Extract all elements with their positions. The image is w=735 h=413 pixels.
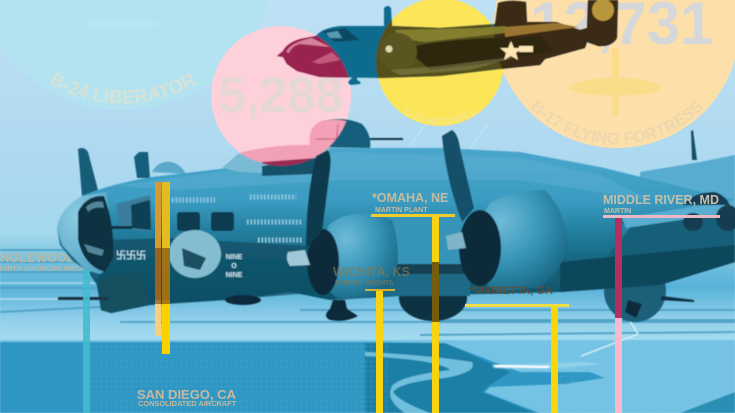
engine 2 spinner — [446, 232, 466, 250]
nose gun — [92, 226, 132, 229]
label: San Diego: CONSOLIDATED AIRCRAFT — [138, 399, 237, 408]
B-25 nose art — [312, 52, 340, 64]
nose art roundel — [169, 230, 221, 278]
aerial ground landscape — [0, 232, 735, 413]
near wing — [560, 200, 735, 292]
circle: B-17 Flying Fortress — [494, 0, 735, 148]
label: San Diego: SAN DIEGO, CA — [137, 387, 237, 402]
label: Inglewood: NORTH AMERICAN AIRCRAFT — [0, 266, 99, 273]
dorsal fin antenna — [691, 130, 697, 160]
propeller blade 1 — [306, 150, 331, 248]
label: Omaha: *OMAHA, NE — [372, 191, 448, 205]
nose art text: NINE — [226, 254, 243, 261]
cockpit pink canopy top — [238, 145, 336, 163]
side window bay — [116, 195, 152, 232]
B-25 rear fuselage sheen — [505, 23, 578, 37]
nose art text — [226, 254, 243, 279]
B-25 tail emblem — [592, 0, 614, 21]
chin gun — [58, 297, 108, 300]
number: 5,288: 5,288 — [218, 67, 343, 123]
bar: Wichita — [365, 289, 395, 413]
nose art text: O — [231, 263, 237, 270]
circle: 5,288 — [211, 26, 351, 166]
lower wing shadow — [560, 245, 735, 292]
B-25 insignia bar — [519, 46, 533, 52]
label: Middle River: MARTIN — [604, 208, 631, 215]
belly hatch — [225, 295, 261, 305]
engine 1 cowling — [318, 213, 398, 300]
far wing and tail — [640, 155, 735, 200]
bomber: B-17 Flying Fortress — [57, 119, 735, 322]
nose dark interior — [78, 196, 113, 272]
B-25 engine cowl — [379, 33, 417, 71]
top turret frames — [316, 124, 339, 140]
B-25 cockpit highlights — [326, 31, 342, 38]
mission marks: 卐卐卐 — [116, 250, 146, 262]
B-25 nose glazing — [286, 38, 330, 53]
B-25 dark engine underside — [405, 36, 552, 70]
wing engine pods — [683, 205, 735, 231]
label: B-25 Mitchell: B-25 MITCHELL — [404, 107, 476, 126]
engine 1 hub — [307, 229, 339, 295]
B-25 star insignia — [500, 41, 522, 60]
top turret — [311, 119, 403, 148]
label: Omaha — [372, 191, 448, 214]
B-25 lower sheen — [390, 56, 520, 75]
B-25 crimson nose — [276, 35, 350, 78]
antenna wires — [410, 124, 488, 148]
engine 2 hub — [459, 210, 501, 286]
exhaust pipe — [370, 264, 470, 274]
nacelle lower shadow — [372, 274, 470, 296]
chin turret — [98, 270, 150, 313]
label: Marietta: *MARIETTA, GA — [470, 285, 553, 297]
label: Inglewood: INGLEWOOD, CA — [0, 251, 100, 265]
propeller blade 2 — [442, 130, 474, 222]
cheek window — [131, 200, 151, 230]
label: Wichita: WICHITA, KS — [333, 265, 410, 279]
cockpit windshield — [222, 148, 330, 175]
ventral ball turret right — [604, 260, 694, 322]
cockpit crimson crew — [262, 158, 316, 168]
top turret pink glazing — [310, 120, 350, 148]
label: Omaha: MARTIN PLANT — [375, 207, 428, 214]
B-25 brown tail — [494, 0, 619, 70]
bars: San Diego pair — [155, 182, 170, 354]
label: Wichita: BOEING WICHITA — [335, 280, 394, 287]
nacelle between engines — [372, 213, 470, 293]
sky background — [0, 0, 735, 236]
label: Inglewood — [0, 251, 100, 273]
wing national marking — [683, 192, 730, 205]
belly ball turret — [399, 275, 467, 321]
B-25 propeller hub — [386, 46, 392, 52]
bomber: B-25 Mitchell in flight — [277, 0, 618, 85]
fuselage windows — [177, 212, 234, 231]
bar: Marietta — [465, 304, 569, 413]
circle: B-24 Liberator — [0, 0, 269, 104]
tail wheel strut — [326, 300, 358, 321]
B-25 olive mid section — [375, 20, 503, 79]
nose art text: NINE — [226, 272, 243, 279]
label: B-24 Liberator: B-24 LIBERATOR — [50, 72, 197, 104]
label: Middle River — [603, 193, 719, 215]
nose chrome highlights — [84, 202, 104, 256]
fuselage — [57, 148, 735, 313]
upper fuselage highlight — [115, 152, 650, 200]
B-25 cockpit window — [322, 28, 360, 42]
label: Wichita — [333, 265, 410, 287]
label: B-17 Flying Fortress: B-17 FLYING FORTRESS — [531, 100, 702, 144]
circle: B-25 Mitchell — [378, 0, 504, 126]
bar: Omaha — [371, 214, 455, 413]
cockpit interior — [262, 158, 316, 176]
engine 2 cowling — [464, 190, 568, 292]
B-25 teal base — [277, 0, 618, 85]
icon: B-17 plane silhouette — [568, 48, 662, 116]
B-25 upper fuselage sheen — [395, 26, 505, 42]
propeller blade left — [78, 148, 98, 196]
lower forward fuselage shadow — [97, 238, 320, 313]
label: Middle River: MIDDLE RIVER, MD — [603, 193, 719, 207]
engine 1 spinner — [287, 250, 310, 266]
rivet panels — [172, 197, 302, 240]
nose plexiglass — [57, 192, 112, 274]
bar: Middle River — [603, 215, 720, 413]
bar: Inglewood — [83, 270, 90, 413]
nose dome and mast — [134, 152, 186, 178]
